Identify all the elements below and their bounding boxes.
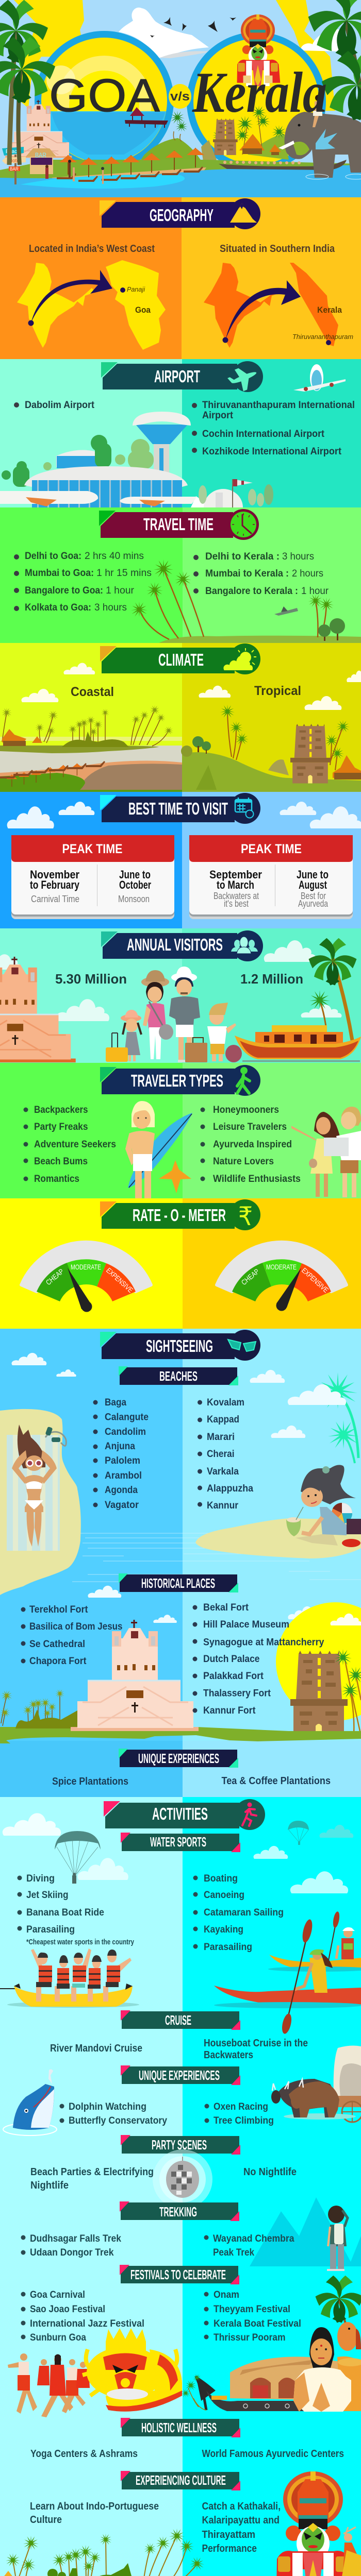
list: kerala unique: Oxen Racing — [214, 2102, 268, 2112]
list: kerala airports: Kozhikode International Airport — [202, 446, 342, 457]
banner: climate: CLIMATE — [158, 650, 204, 669]
subheading: unique experiences activities — [121, 2065, 240, 2085]
card: kerala peak time — [189, 835, 353, 919]
list: goa beaches: Vagator — [105, 1500, 139, 1511]
list: goa historical places — [21, 1604, 123, 1667]
panel: traveler types — [0, 1063, 361, 1198]
illustration: coastal beach — [0, 705, 182, 792]
list: goa beaches: Calangute — [105, 1412, 149, 1423]
map: india kerala: Thiruvananthapuram — [292, 333, 353, 341]
list: kerala airports: Airport — [202, 410, 234, 421]
card: kerala peak time: Backwaters at — [214, 891, 259, 901]
banana boat — [0, 1948, 139, 2008]
list: goa water sports: *Cheapest water sports in the country — [26, 1938, 135, 1946]
subheading: unique experiences: UNIQUE EXPERIENCES — [138, 1751, 219, 1766]
card: kerala peak time: Ayurveda — [298, 899, 329, 909]
list: goa travelers: Adventure Seekers — [34, 1139, 116, 1150]
list: kerala historical places: Thalassery Fort — [203, 1688, 271, 1699]
huts — [239, 134, 281, 155]
list: goa beaches: Candolim — [105, 1427, 146, 1437]
subheading: water sports — [121, 1833, 240, 1852]
banner: best time to visit: BEST TIME TO VISIT — [128, 799, 228, 818]
panel: climate — [0, 643, 361, 792]
figure: 1.2 million: 1.2 Million — [240, 971, 303, 987]
gauge: goa: CHEAP — [44, 1267, 65, 1286]
snake boat — [219, 160, 347, 170]
subheading: festivals to celebrate — [120, 2265, 239, 2284]
kathakali performer — [276, 2471, 361, 2576]
subheading: beaches: BEACHES — [159, 1368, 198, 1384]
subheading: water sports: WATER SPORTS — [150, 1834, 206, 1850]
pier hut — [125, 107, 168, 128]
list: kerala travelers: Honeymooners — [213, 1105, 279, 1115]
list: goa beaches: Agonda — [105, 1485, 138, 1496]
banner: travel time — [99, 509, 259, 540]
text: kerala culture: Catch a Kathakali, — [202, 2501, 281, 2512]
text: goa party: Beach Parties & Electrifying — [30, 2166, 154, 2178]
title kerala: Kerala — [192, 61, 327, 125]
hills and sand — [0, 134, 361, 197]
text: kerala cruise: Houseboat Cruise in the — [204, 2038, 308, 2049]
text: goa culture: Culture — [30, 2514, 62, 2526]
houseboat with palms — [235, 937, 361, 1062]
signposts: Beach — [6, 149, 20, 155]
list: kerala airports: Thiruvananthapuram International — [202, 400, 355, 411]
versus badge: v/s — [170, 90, 190, 104]
list: kerala festivals: Kerala Boat Festival — [214, 2318, 301, 2329]
banner: best time to visit — [100, 793, 260, 824]
bar hut: BAR — [35, 151, 46, 159]
list: kerala travel time: Mumbai to Kerala : — [205, 568, 289, 579]
illustration: tropical hill and temple — [181, 705, 361, 792]
list: kerala travelers: Ayurveda Inspired — [213, 1139, 292, 1150]
list: kerala travelers: Wildlife Enthusiasts — [213, 1174, 301, 1184]
map: india goa — [17, 260, 166, 350]
list: goa unique: Dolphin Watching — [69, 2102, 146, 2112]
subheading: festivals to celebrate: FESTIVALS TO CELEBRATE — [130, 2267, 226, 2282]
list: kerala festivals: Thrissur Pooram — [214, 2332, 286, 2343]
list: goa beaches: Anjuna — [105, 1441, 135, 1452]
map: india goa: Goa — [135, 305, 151, 315]
text: kerala cruise — [204, 2038, 308, 2061]
list: kerala travel time — [193, 551, 329, 597]
list: kerala historical places: Synagogue at Mattancherry — [203, 1637, 324, 1648]
list: goa travelers — [24, 1105, 116, 1184]
banner: geography: GEOGRAPHY — [150, 206, 214, 225]
list: goa travel time: 3 hours — [94, 602, 127, 613]
water ripples — [72, 1533, 361, 1582]
subheading: holistic wellness — [121, 2418, 240, 2437]
subheading: experiencing culture — [121, 2471, 240, 2490]
title goa: GOA — [49, 70, 160, 122]
list: goa historical places: Basilica of Bom Jesus — [29, 1621, 123, 1632]
kathakali figure — [237, 14, 280, 86]
text: goa culture: Learn About Indo-Portuguese — [30, 2501, 159, 2512]
panel: airport — [0, 359, 361, 507]
list: goa travel time: Bangalore to Goa: — [25, 585, 103, 596]
list: goa trekking: Dudhsagar Falls Trek — [30, 2233, 121, 2244]
list: kerala water sports: Canoeing — [204, 1890, 244, 1901]
banner: rate-o-meter: ₹ — [238, 1201, 253, 1231]
panel: activities — [0, 1797, 361, 2576]
card: goa peak time: October — [119, 878, 151, 891]
banner: travel time: TRAVEL TIME — [143, 515, 214, 534]
subheading: trekking — [120, 2201, 239, 2221]
list: goa water sports: Jet Skiing — [26, 1890, 68, 1901]
list: kerala beaches: Marari — [207, 1432, 235, 1443]
clouds — [11, 1353, 305, 1623]
list: goa airports: Dabolim Airport — [25, 400, 95, 411]
list: kerala beaches: Varkala — [207, 1466, 239, 1477]
list: goa beaches — [93, 1397, 149, 1511]
versus badge — [169, 84, 191, 109]
panel: best time to visit — [0, 792, 361, 928]
text: kerala culture — [202, 2501, 281, 2554]
airport illustration — [0, 412, 273, 507]
clouds — [119, 8, 344, 58]
list: goa festivals: International Jazz Festival — [30, 2318, 144, 2329]
ox cart — [271, 2046, 361, 2122]
kayaks — [214, 1911, 361, 2035]
list: kerala airports: Cochin International Airport — [202, 429, 325, 439]
list: goa water sports: Banana Boat Ride — [26, 1907, 104, 1918]
gauge: kerala: EXPENSIVE — [300, 1266, 330, 1294]
map: india kerala — [204, 263, 353, 348]
list: goa trekking — [21, 2233, 121, 2258]
text: goa culture — [30, 2501, 159, 2526]
church illustration — [0, 957, 76, 1062]
panel: hero — [0, 0, 361, 197]
list: kerala airports — [192, 400, 355, 457]
card: goa peak time: June to — [119, 868, 151, 881]
dolphin — [3, 2069, 57, 2136]
list: kerala unique — [204, 2102, 274, 2126]
panel: annual visitors — [0, 928, 361, 1063]
list: goa festivals — [21, 2290, 144, 2343]
heading: tropical: Tropical — [254, 684, 301, 698]
list: kerala beaches — [198, 1397, 253, 1511]
mountains and hiker — [250, 2197, 361, 2271]
gauge: kerala: CHEAP — [240, 1267, 261, 1286]
card: kerala peak time: Best for — [301, 891, 326, 901]
church — [5, 100, 72, 158]
panel: geography — [0, 197, 361, 359]
text: kerala unique: Tea & Coffee Plantations — [222, 1775, 331, 1787]
list: kerala historical places: Palakkad Fort — [203, 1671, 264, 1682]
kerala festival illustration — [181, 2274, 361, 2412]
subheading: unique experiences — [119, 1749, 238, 1768]
temple — [213, 118, 238, 155]
right island with girl — [195, 1465, 361, 1558]
banner: climate — [100, 643, 260, 674]
text: kerala cruise: Backwaters — [204, 2049, 253, 2061]
boy — [207, 1003, 242, 1062]
list: kerala festivals: Onam — [214, 2290, 239, 2300]
list: kerala beaches: Kovalam — [207, 1397, 244, 1408]
figure: 5.30 million: 5.30 Million — [55, 971, 127, 987]
list: kerala travel time: Delhi to Kerala : — [205, 551, 280, 562]
elephant with rider — [278, 95, 361, 179]
map: india goa: Panaji — [127, 285, 145, 293]
panel: rate-o-meter — [0, 1198, 361, 1329]
card: goa peak time: Monsoon — [118, 894, 150, 904]
list: goa travel time: 1 hour — [106, 585, 135, 596]
list: kerala travel time: 3 hours — [282, 551, 314, 562]
list: kerala historical places: Hill Palace Museum — [203, 1619, 289, 1630]
list: kerala historical places: Bekal Fort — [203, 1602, 249, 1613]
kerala location text: Situated in Southern India — [220, 243, 335, 255]
kerala circle — [187, 32, 326, 171]
list: goa travelers: Party Freaks — [34, 1122, 88, 1132]
panel: travel time — [0, 507, 361, 643]
list: kerala travelers: Nature Lovers — [213, 1156, 274, 1167]
list: goa travel time: Mumbai to Goa: — [25, 568, 94, 579]
list: goa water sports — [18, 1873, 135, 1946]
card: kerala peak time: to March — [217, 878, 254, 891]
banner: sightseeing: SIGHTSEEING — [146, 1336, 213, 1355]
card: goa peak time — [11, 835, 174, 919]
list: kerala beaches: Kannur — [207, 1500, 239, 1511]
banner: airport — [101, 361, 263, 395]
card: goa peak time: PEAK TIME — [62, 842, 123, 856]
parachute left — [55, 1831, 101, 1884]
clouds — [0, 940, 342, 1021]
text: goa cruise: River Mandovi Cruise — [50, 2043, 142, 2054]
list: kerala historical places: Kannur Fort — [203, 1705, 256, 1716]
gauge: kerala: MODERATE — [266, 1263, 297, 1271]
illustration: sun and temple — [276, 1602, 361, 1736]
illustration: ground and church — [0, 1620, 361, 1743]
gauge: goa — [21, 1242, 151, 1312]
palm landscape — [0, 2529, 204, 2576]
list: kerala water sports: Catamaran Sailing — [204, 1907, 284, 1918]
card: kerala peak time: PEAK TIME — [241, 842, 302, 856]
list: goa travel time: Kolkata to Goa: — [25, 602, 91, 613]
list: kerala travel time: Bangalore to Kerala : — [205, 586, 298, 597]
plane top right — [293, 364, 346, 392]
banner: activities: ACTIVITIES — [152, 1804, 208, 1823]
list: kerala water sports: Boating — [204, 1873, 238, 1884]
list: kerala water sports: Parasailing — [204, 1942, 252, 1953]
surfer with board and starfish — [125, 1101, 192, 1198]
parachute right — [288, 1821, 309, 1845]
sand island with sunbather — [0, 1409, 81, 1595]
list: kerala historical places — [193, 1602, 324, 1716]
beach umbrellas and loungers — [57, 148, 204, 184]
text: kerala culture: Performance — [202, 2543, 257, 2554]
gauge: goa: MODERATE — [71, 1263, 101, 1271]
list: goa travel time: Delhi to Goa: — [25, 551, 81, 562]
clouds — [3, 1813, 353, 1893]
text: goa party: Nightlife — [30, 2180, 69, 2191]
list: kerala water sports — [193, 1873, 284, 1953]
subheading: experiencing culture: EXPERIENCING CULTURE — [136, 2472, 226, 2488]
card: goa peak time: November — [30, 868, 79, 881]
banner: geography — [100, 198, 260, 229]
dancers — [8, 2353, 90, 2417]
list: goa festivals: Goa Carnival — [30, 2290, 85, 2300]
list: goa travel time: 2 hrs 40 mins — [85, 551, 144, 562]
list: goa water sports: Parasailing — [26, 1924, 75, 1935]
signposts — [2, 147, 26, 184]
palms right small — [170, 106, 286, 155]
text: goa wellness: Yoga Centers & Ashrams — [30, 2448, 138, 2460]
subheading: holistic wellness: HOLISTIC WELLNESS — [141, 2420, 217, 2435]
family illustration — [106, 967, 242, 1062]
list: kerala travelers — [200, 1105, 301, 1184]
goa circle — [35, 31, 174, 170]
list: kerala trekking — [204, 2233, 294, 2258]
subheading: historical places: HISTORICAL PLACES — [141, 1575, 215, 1591]
map: india kerala: Kerala — [317, 305, 342, 315]
clouds — [7, 802, 361, 828]
list: kerala historical places: Dutch Palace — [203, 1654, 260, 1665]
gauge: kerala — [217, 1242, 347, 1311]
card: goa peak time: Carnival Time — [31, 894, 79, 904]
list: goa travelers: Beach Bums — [34, 1156, 88, 1167]
list: kerala travel time: 1 hour — [301, 586, 329, 597]
list: kerala unique: Tree Climbing — [214, 2115, 274, 2126]
banner: airport: AIRPORT — [154, 367, 200, 386]
birds — [150, 17, 236, 38]
subheading: cruise — [121, 2010, 240, 2030]
list: kerala beaches: Cherai — [207, 1449, 234, 1460]
subheading: trekking: TREKKING — [159, 2204, 197, 2219]
list: goa historical places: Chapora Fort — [29, 1656, 87, 1667]
list: kerala beaches: Kappad — [207, 1414, 239, 1425]
list: kerala festivals — [204, 2290, 301, 2343]
subheading: beaches — [119, 1366, 238, 1385]
list: kerala trekking: Wayanad Chembra — [213, 2233, 294, 2244]
banner: traveler types — [100, 1065, 260, 1096]
banner: sightseeing — [100, 1330, 260, 1361]
bar hut — [26, 148, 56, 179]
list: goa water sports: Diving — [26, 1873, 55, 1884]
gauge: goa: EXPENSIVE — [105, 1266, 135, 1294]
list: goa beaches: Baga — [105, 1397, 126, 1408]
list: goa unique: Butterfly Conservatory — [69, 2115, 167, 2126]
signposts: BAR — [10, 166, 19, 172]
list: kerala travel time: 2 hours — [292, 568, 323, 579]
text: goa unique: Spice Plantations — [52, 1776, 128, 1787]
list: goa festivals: Sunburn Goa — [30, 2332, 86, 2343]
banner: traveler types: TRAVELER TYPES — [131, 1071, 223, 1090]
banner: annual visitors: ANNUAL VISITORS — [127, 935, 223, 954]
list: goa travelers: Romantics — [34, 1174, 79, 1184]
card: kerala peak time: June to — [297, 868, 329, 881]
list: goa historical places: Se Cathedral — [29, 1639, 85, 1650]
list: goa unique — [60, 2102, 167, 2126]
list: kerala travelers: Leisure Travelers — [213, 1122, 287, 1132]
heading: coastal: Coastal — [71, 685, 114, 699]
palms and ground — [131, 560, 361, 643]
card: kerala peak time: September — [209, 868, 262, 881]
list: goa beaches: Palolem — [105, 1455, 140, 1466]
clouds — [22, 663, 361, 710]
list: goa travelers: Backpackers — [34, 1105, 88, 1115]
couple with map — [291, 1107, 361, 1197]
left palms — [0, 0, 55, 165]
goa location text: Located in India’s West Coast — [29, 243, 155, 255]
text: goa party — [30, 2166, 154, 2191]
palms with cloud right — [288, 1372, 359, 1619]
list: goa trekking: Udaan Dongor Trek — [30, 2247, 114, 2258]
right palms — [308, 0, 361, 120]
onam sun mask — [83, 2328, 182, 2412]
subheading: party scenes: PARTY SCENES — [152, 2137, 207, 2153]
list: goa festivals: Sao Joao Festival — [30, 2304, 105, 2315]
banner: annual visitors — [101, 930, 263, 961]
card: kerala peak time: August — [299, 878, 327, 891]
subheading: unique experiences activities: UNIQUE EXPERIENCES — [139, 2067, 220, 2083]
text: kerala culture: Thirayattam — [202, 2529, 255, 2540]
list: goa travel time — [14, 551, 152, 613]
card: kerala peak time: it's best — [224, 899, 249, 909]
subheading: party scenes — [121, 2135, 240, 2155]
list: goa travel time: 1 hr 15 mins — [96, 568, 152, 579]
list: kerala festivals: Theyyam Festival — [214, 2304, 290, 2315]
list: kerala trekking: Peak Trek — [213, 2247, 254, 2258]
subheading: historical places — [119, 1573, 238, 1592]
banner: rate-o-meter: RATE - O - METER — [133, 1206, 226, 1225]
banner: activities — [104, 1799, 265, 1830]
card: goa peak time: to February — [30, 878, 80, 891]
subheading: cruise: CRUISE — [165, 2012, 191, 2028]
list: goa historical places: Terekhol Fort — [29, 1604, 88, 1615]
banner: rate-o-meter — [100, 1199, 260, 1231]
list: kerala water sports: Kayaking — [204, 1924, 243, 1935]
disco ball — [153, 2149, 212, 2209]
text: kerala culture: Kalaripayattu and — [202, 2515, 280, 2526]
list: goa beaches: Arambol — [105, 1470, 142, 1481]
list: kerala beaches: Alappuzha — [207, 1483, 253, 1494]
signposts: Hotel — [9, 158, 21, 164]
panel: sightseeing — [0, 1329, 361, 1797]
text: kerala party: No Nightlife — [243, 2166, 297, 2178]
